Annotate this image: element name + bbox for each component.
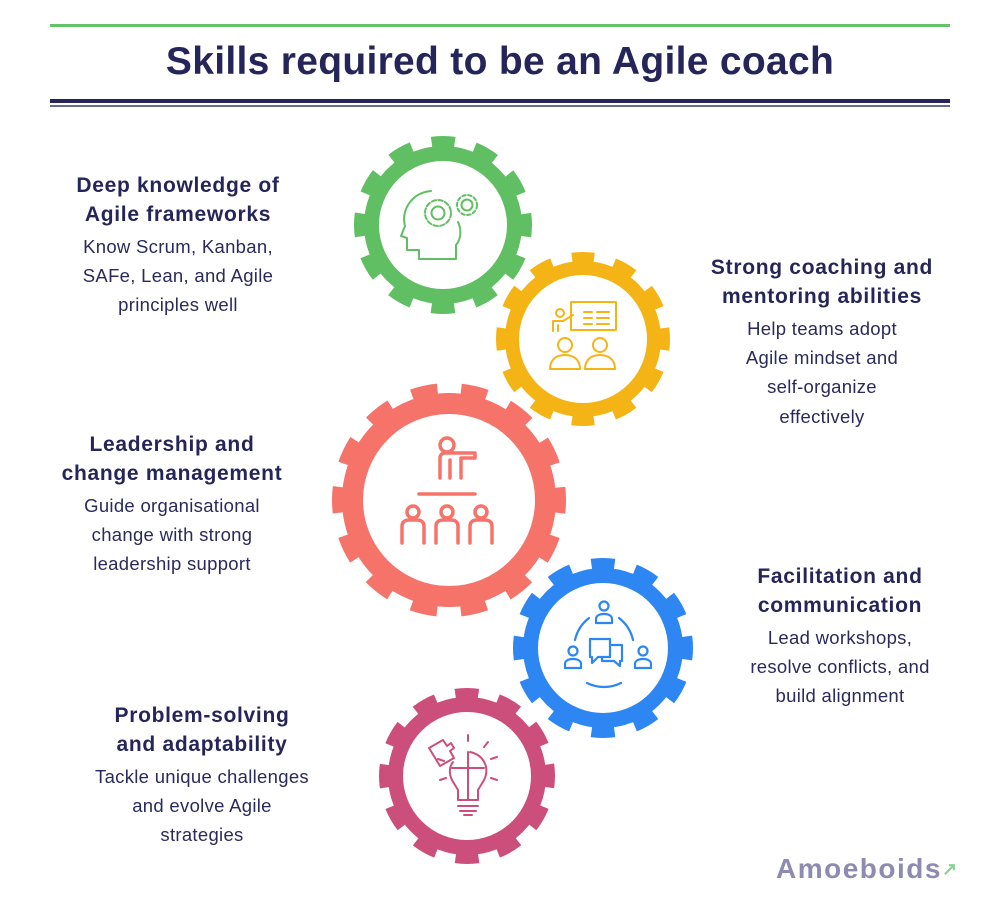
- text: leadership: change management: [62, 462, 282, 484]
- text: leadership: [62, 433, 282, 574]
- icon: head with gears: [401, 191, 477, 259]
- gear: pink: [385, 694, 549, 858]
- text: facilitation: build alignment: [776, 685, 904, 706]
- text: problem-solving: Problem-solving: [114, 704, 290, 727]
- text: facilitation: Facilitation and: [757, 565, 923, 588]
- text: leadership: leadership support: [93, 553, 251, 574]
- text: coaching: mentoring abilities: [722, 284, 922, 308]
- text: problem-solving: and evolve Agile: [132, 795, 272, 816]
- text: leadership: Leadership and: [89, 433, 254, 456]
- bottom navy lines: [50, 99, 950, 107]
- logo: Amoeboids: Amoeboids↗: [776, 853, 959, 884]
- gear: green: [360, 142, 526, 308]
- text: deep knowledge: [76, 174, 280, 315]
- text: problem-solving: and adaptability: [116, 732, 288, 756]
- icon: presenter with audience: [550, 302, 616, 369]
- text: coaching: effectively: [779, 406, 865, 427]
- text: coaching: self-organize: [767, 376, 877, 397]
- text: leadership: Guide organisational: [84, 495, 260, 516]
- gear: red: [338, 390, 560, 610]
- icon: leader and team: [402, 438, 492, 543]
- gear: blue: [520, 564, 686, 732]
- top green line: [50, 24, 950, 27]
- text: facilitation: resolve conflicts, and: [750, 656, 930, 677]
- text: coaching: [711, 256, 933, 427]
- text: deep knowledge: Agile frameworks: [85, 202, 271, 226]
- text: leadership: change with strong: [92, 524, 252, 545]
- text: deep knowledge: Know Scrum, Kanban,: [83, 236, 273, 257]
- gear: yellow: [502, 258, 664, 420]
- text: facilitation: Lead workshops,: [768, 627, 912, 648]
- icon: facilitation circle: [565, 602, 651, 687]
- text: problem-solving: Tackle unique challenges: [95, 766, 309, 787]
- text: facilitation: communication: [758, 594, 922, 616]
- text: coaching: Strong coaching and: [711, 256, 933, 279]
- text: deep knowledge: Deep knowledge of: [76, 174, 280, 197]
- text: coaching: Help teams adopt: [747, 318, 897, 339]
- text: coaching: Agile mindset and: [746, 347, 898, 368]
- text: problem-solving: strategies: [160, 824, 244, 845]
- text: deep knowledge: SAFe, Lean, and Agile: [83, 265, 273, 286]
- text: deep knowledge: principles well: [118, 294, 238, 315]
- text: problem-solving: [95, 704, 309, 845]
- title: Skills required to be an Agile coach: [166, 40, 834, 83]
- icon: puzzle bulb: [429, 735, 497, 815]
- text: facilitation: [750, 565, 930, 706]
